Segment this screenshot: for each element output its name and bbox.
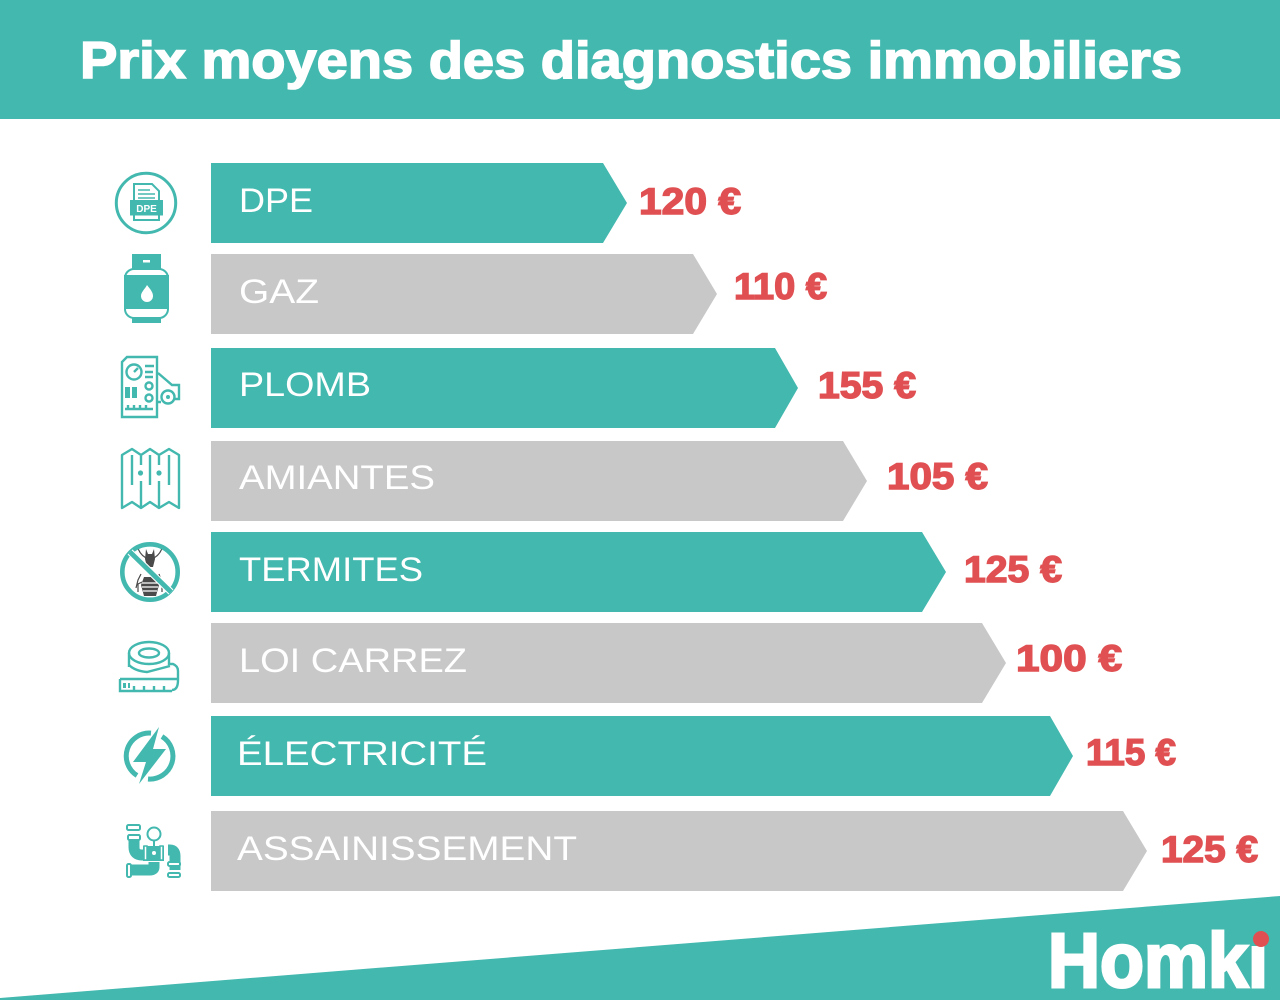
label: AMIANTES: AMIANTES [239, 459, 435, 497]
row: TERMITES [122, 532, 1062, 612]
icon: corrugated asbestos sheet [122, 449, 179, 508]
bar: TERMITES [211, 532, 946, 612]
row: ASSAINISSEMENT [127, 811, 1258, 891]
icon: tape measure [120, 642, 178, 691]
icon: pipes and valve [127, 825, 180, 877]
row: AMIANTES [122, 441, 988, 521]
label: PLOMB: PLOMB [239, 366, 371, 404]
label: ASSAINISSEMENT: ASSAINISSEMENT [237, 830, 577, 868]
label: DPE: DPE [239, 182, 313, 220]
icon: DPE document [116, 173, 176, 233]
icon: gas bottle [124, 254, 169, 323]
row: ÉLECTRICITÉ [126, 716, 1176, 796]
label: TERMITES: TERMITES [239, 551, 423, 589]
row: LOI CARREZ [120, 623, 1122, 703]
bar: PLOMB [211, 348, 798, 428]
bar: ÉLECTRICITÉ [211, 716, 1073, 796]
value: GAZ: 110 € [734, 266, 827, 307]
bar: LOI CARREZ [211, 623, 1006, 703]
bar: ASSAINISSEMENT [211, 811, 1147, 891]
icon: DPE document: DPE [136, 204, 157, 215]
value: ÉLECTRICITÉ: 115 € [1086, 732, 1176, 773]
icon: lead detector and van [122, 357, 179, 417]
bar: DPE [211, 163, 627, 243]
row: DPE [116, 163, 741, 243]
icon: lightning bolt [126, 727, 173, 784]
value: TERMITES: 125 € [964, 549, 1062, 590]
row: GAZ [124, 254, 827, 334]
value: PLOMB: 155 € [818, 365, 916, 406]
row: PLOMB [122, 348, 916, 428]
label: LOI CARREZ: LOI CARREZ [239, 642, 467, 680]
bar: GAZ [211, 254, 717, 334]
title: Prix moyens des diagnostics immobiliers [80, 32, 1182, 90]
value: LOI CARREZ: 100 € [1016, 638, 1122, 679]
header band [0, 0, 1280, 119]
icon: no termites [122, 544, 178, 600]
value: AMIANTES: 105 € [887, 456, 988, 497]
label: GAZ: GAZ [239, 273, 319, 311]
value: ASSAINISSEMENT: 125 € [1161, 829, 1258, 870]
label: ÉLECTRICITÉ: ÉLECTRICITÉ [237, 735, 487, 773]
value: DPE: 120 € [639, 181, 741, 222]
bar: AMIANTES [211, 441, 867, 521]
footer band [0, 896, 1280, 1000]
